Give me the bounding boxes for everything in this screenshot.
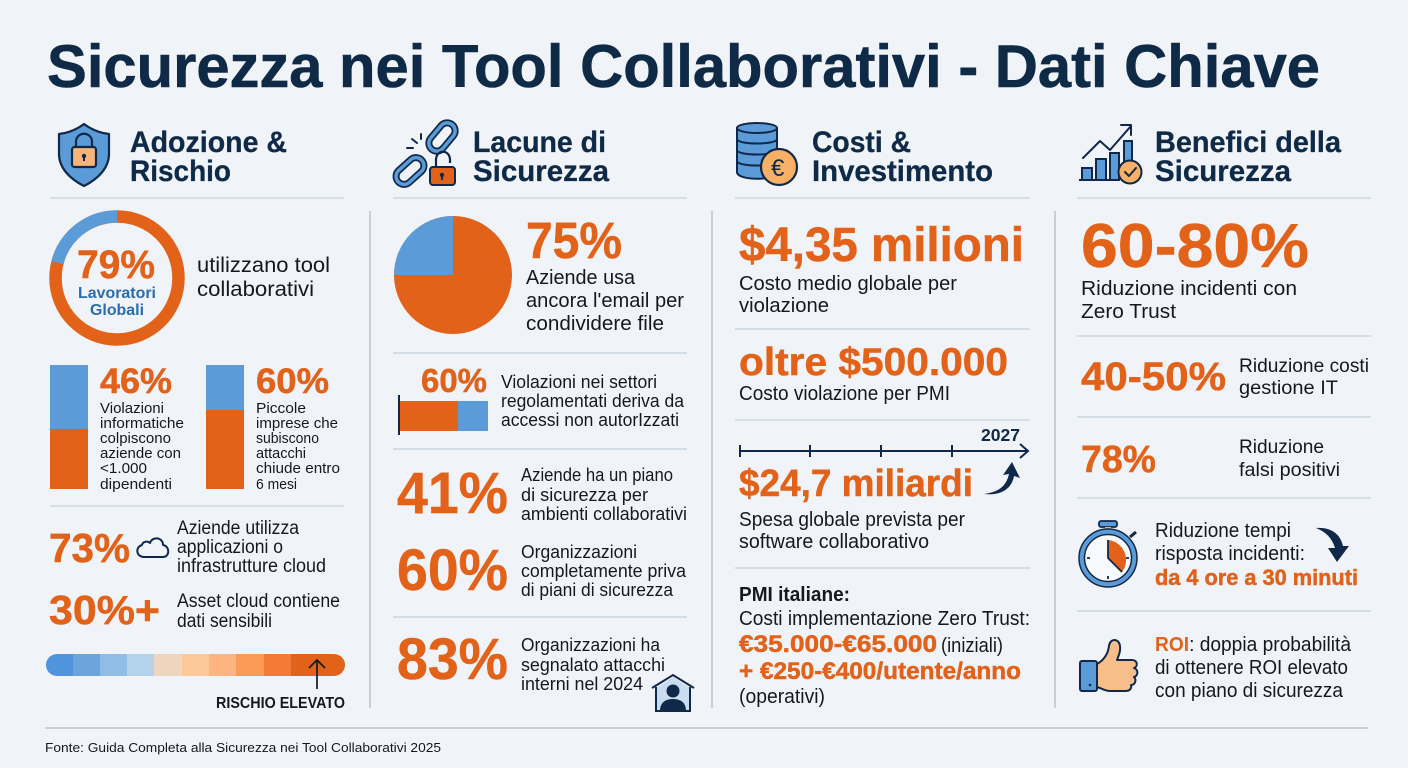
icon: stopwatch (1079, 521, 1137, 587)
icon: broken chain and open padlock (393, 120, 458, 188)
stat: 60%: Organizzazioni (521, 542, 637, 562)
stat: 83%: Organizzazioni ha (521, 635, 661, 655)
stat: 73% cloud: applicazioni o (177, 537, 283, 558)
stat: 46% violazioni: informatiche (100, 415, 184, 432)
stat: oltre $500.000: oltre $500.000 (739, 341, 1008, 384)
stat: 60% piccole imprese: attacchi (256, 445, 306, 462)
stat: 73% cloud: Aziende utilizza (177, 518, 299, 539)
text: roi (1155, 634, 1352, 702)
stat: 46% violazioni: Violazioni (100, 400, 164, 417)
icon: coin stack with euro: € (771, 155, 785, 182)
stat: 41%: ambienti collaborativi (521, 504, 687, 524)
text: roi: con piano di sicurezza (1155, 680, 1344, 702)
stat: 83% (397, 627, 665, 694)
stat: $24,7 miliardi (739, 463, 973, 553)
stat: $4,35 milioni: Costo medio globale per (739, 272, 957, 295)
stat: 75% email: Aziende usa (526, 267, 636, 289)
donut chart: 79% lavoratori globali: 79% (77, 243, 155, 287)
risk gradient scale: RISCHIO ELEVATO (216, 695, 345, 712)
stat: 60% piccole imprese: imprese che (256, 415, 338, 432)
heading: lacune di sicurezza: Sicurezza (473, 155, 609, 188)
stat: 75% email (526, 212, 684, 335)
stat: 60-80% (1081, 212, 1309, 323)
stat: 78%: Riduzione (1239, 436, 1324, 458)
stat: 46% violazioni: 46% (100, 362, 172, 401)
stat: 73% cloud: 73% (49, 525, 130, 571)
icon: house with person (652, 675, 694, 711)
stat: $24,7 miliardi: software collaborativo (739, 530, 929, 553)
text: roi: ROI: doppia probabilità (1155, 634, 1352, 656)
stat: $24,7 miliardi: Spesa globale prevista per (739, 508, 965, 531)
stat: 46% violazioni: colpiscono (100, 430, 171, 447)
stat: 60% piccole imprese (206, 362, 340, 493)
stat: 60% piccole imprese: subiscono (256, 430, 319, 447)
heading: benefici della sicurezza (1155, 126, 1341, 188)
panel: adozione e rischio (46, 124, 345, 712)
stat: 60% violazioni settori regolamentati: accessi non autorIzzati (501, 410, 679, 430)
stat: 60% violazioni settori regolamentati (399, 362, 685, 435)
heading: costi e investimento: Costi & (812, 126, 911, 159)
text: pmi italiane zero trust: (operativi) (739, 686, 825, 708)
stat: 60% piccole imprese: chiude entro (256, 460, 340, 477)
stat: 78%: falsi positivi (1239, 459, 1340, 481)
stat: 75% email: ancora l'email per (526, 290, 684, 312)
heading: benefici della sicurezza: Benefici della (1155, 126, 1341, 159)
arrow: high risk marker (309, 660, 325, 689)
text: utilizzano tool collaborativi: collaborativi (197, 277, 314, 301)
stat: 78%: 78% (1081, 439, 1156, 481)
stat: 60% (397, 538, 687, 603)
text: roi: di ottenere ROI elevato (1155, 657, 1348, 679)
heading: adozione e rischio: Rischio (130, 155, 231, 188)
heading: lacune di sicurezza (473, 126, 609, 188)
stat: 78% (1081, 436, 1340, 481)
stat: 60-80%: 60-80% (1081, 212, 1309, 281)
donut chart: 79% lavoratori globali: Lavoratori (78, 285, 156, 302)
icon: rising bar chart with check (1079, 125, 1142, 184)
stat: 83%: segnalato attacchi (521, 655, 665, 675)
pie chart: 75% (394, 216, 512, 334)
stat: 73% cloud: infrastrutture cloud (177, 556, 326, 577)
stat: 41%: di sicurezza per (521, 485, 648, 505)
stat: 83%: 83% (397, 627, 508, 692)
stat: 60% piccole imprese: Piccole (256, 400, 306, 417)
heading: adozione e rischio (130, 126, 287, 188)
timeline to 2027: 2027 (981, 425, 1020, 445)
stat: 30%+ asset cloud: dati sensibili (177, 611, 272, 632)
stat: 60-80%: Riduzione incidenti con (1081, 277, 1297, 300)
icon: cloud (137, 538, 168, 557)
stat: 60-80%: Zero Trust (1081, 300, 1176, 323)
text: pmi italiane zero trust (739, 584, 1030, 708)
stat: 75% email: 75% (526, 212, 622, 269)
stat: $4,35 milioni (739, 219, 1024, 317)
stat: 41%: Aziende ha un piano (521, 465, 673, 485)
timeline to 2027 (740, 425, 1028, 458)
stat: 60% violazioni settori regolamentati: regolamentati deriva da (501, 391, 685, 411)
stat: 75% email: condividere file (526, 313, 664, 335)
stat: 30%+ asset cloud: Asset cloud contiene (177, 591, 340, 612)
title: Sicurezza nei Tool Collaborativi - Dati Chiave (47, 33, 1320, 100)
footer source: Fonte: Guida Completa alla Sicurezza nei Tool Collaborativi 2025 (45, 740, 441, 755)
text: pmi italiane zero trust: PMI italiane: (739, 584, 850, 606)
heading: costi e investimento: Investimento (812, 155, 993, 188)
stat: oltre $500.000 (739, 341, 1008, 405)
risk gradient scale (46, 654, 345, 712)
stat: $24,7 miliardi: $24,7 miliardi (739, 463, 973, 505)
heading: benefici della sicurezza: Sicurezza (1155, 155, 1291, 188)
stat: oltre $500.000: Costo violazione per PMI (739, 382, 950, 405)
text: pmi italiane zero trust: €35.000-€65.000 (739, 631, 937, 658)
stat: 41%: 41% (397, 461, 508, 526)
stat: 46% violazioni (50, 362, 184, 493)
text: riduzione tempi risposta: Riduzione tempi (1155, 520, 1291, 542)
text: pmi italiane zero trust: (iniziali) (941, 635, 1003, 657)
stat: 60% violazioni settori regolamentati: Violazioni nei settori (501, 372, 657, 392)
stat: 46% violazioni: aziende con (100, 445, 181, 462)
text: riduzione tempi risposta: risposta incidenti: (1155, 543, 1305, 565)
text: riduzione tempi risposta (1155, 520, 1358, 590)
arrow: upward growth (984, 462, 1020, 494)
stat: 40-50%: gestione IT (1239, 377, 1338, 399)
text: pmi italiane zero trust: Costi implementazione Zero Trust: (739, 608, 1030, 630)
donut chart: 79% lavoratori globali (56, 216, 178, 340)
stat: 60% piccole imprese: 6 mesi (256, 476, 297, 493)
stat: 30%+ asset cloud (49, 587, 340, 633)
stat: 40-50%: Riduzione costi (1239, 355, 1369, 377)
text: pmi italiane zero trust: + €250-€400/utente/anno (739, 658, 1021, 685)
heading: adozione e rischio: Adozione & (130, 126, 287, 159)
icon: shield with padlock (59, 124, 109, 186)
stat: 41% (397, 461, 687, 526)
icon: thumbs up (1080, 640, 1137, 691)
stat: 46% violazioni: <1.000 (100, 460, 147, 477)
panel: costi e investimento (735, 123, 1030, 708)
stat: 60% piccole imprese: 60% (256, 362, 329, 401)
stat: 83%: interni nel 2024 (521, 674, 643, 694)
text: utilizzano tool collaborativi (197, 253, 330, 301)
donut chart: 79% lavoratori globali: Globali (90, 302, 144, 319)
icon: coin stack with euro (737, 123, 797, 185)
stat: 30%+ asset cloud: 30%+ (49, 587, 160, 633)
stat: $4,35 milioni: $4,35 milioni (739, 219, 1024, 272)
panel: lacune di sicurezza (393, 120, 694, 711)
text: riduzione tempi risposta: da 4 ore a 30 minuti (1155, 565, 1358, 590)
stat: 60%: 60% (397, 538, 508, 603)
stat: 46% violazioni: dipendenti (100, 476, 172, 493)
stat: 73% cloud (49, 518, 326, 577)
panel: benefici della sicurezza (1077, 125, 1371, 702)
arrow: downward reduction (1316, 528, 1349, 562)
stat: $4,35 milioni: violazione (739, 294, 829, 317)
stat: 60%: completamente priva (521, 561, 687, 581)
stat: 60%: di piani di sicurezza (521, 580, 674, 600)
heading: costi e investimento (812, 126, 993, 188)
heading: lacune di sicurezza: Lacune di (473, 126, 606, 159)
stat: 40-50% (1081, 355, 1369, 399)
stat: 40-50%: 40-50% (1081, 355, 1226, 399)
stat: 60% violazioni settori regolamentati: 60% (421, 362, 487, 399)
text: utilizzano tool collaborativi: utilizzano tool (197, 253, 330, 277)
